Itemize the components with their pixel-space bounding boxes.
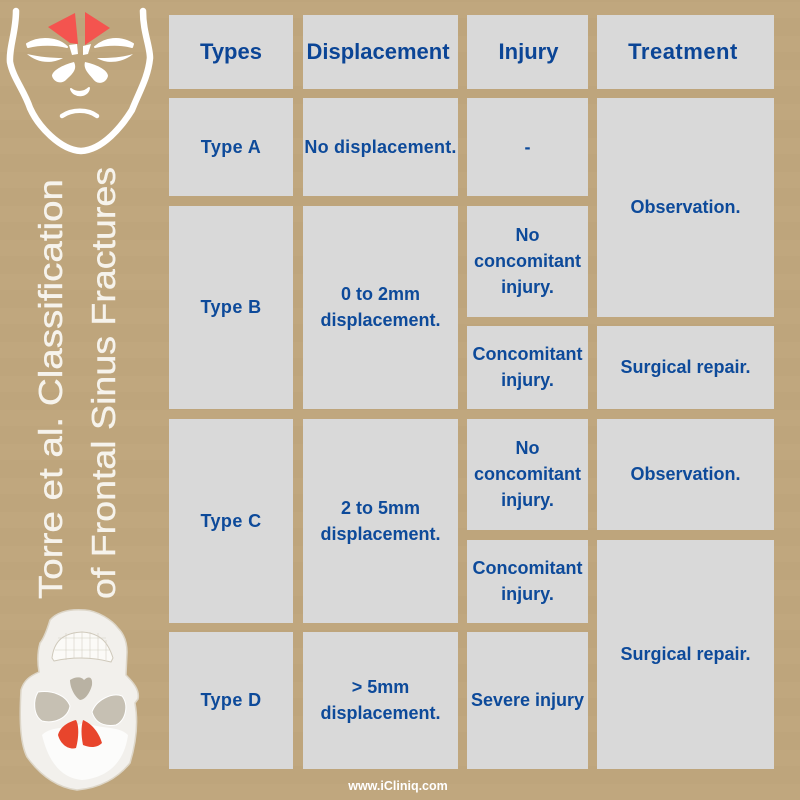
header: Displacement: Displacement: [306, 39, 450, 64]
row: Type D displacement: [303, 632, 458, 769]
row: Type B no concomitant injury: injury.: [501, 277, 554, 297]
row: Type C displacement: displacement.: [320, 524, 441, 544]
row: Type B concomitant injury: injury.: [501, 370, 554, 390]
header: Types: Types: [200, 39, 262, 64]
row: Type A label: [169, 98, 293, 196]
row: Type B no concomitant injury: [467, 206, 588, 317]
row: Type D label: [169, 632, 293, 769]
row: Type C no concomitant injury: No: [515, 438, 539, 458]
row: Type C concomitant injury: Concomitant: [472, 558, 582, 578]
header: Types: [169, 15, 293, 89]
row: Type C concomitant injury: injury.: [501, 584, 554, 604]
footer: website: www.iCliniq.com: [348, 779, 448, 793]
header: Displacement: [303, 15, 458, 89]
treatment: observation for C: [597, 419, 774, 530]
title: Torre et al. Classification: [32, 179, 69, 599]
table: classification: [169, 15, 774, 769]
header: Treatment: [597, 15, 774, 89]
row: Type B no concomitant injury: No: [515, 225, 539, 245]
row: Type B label: [169, 206, 293, 409]
treatment: surgical repair for C and D: [597, 540, 774, 769]
row: Type B displacement: 0 to 2mm: [341, 284, 420, 304]
header: Injury: Injury: [499, 39, 558, 64]
row: Type B displacement: displacement.: [320, 310, 441, 330]
header: Injury: [467, 15, 588, 89]
row: Type C displacement: 2 to 5mm: [341, 498, 420, 518]
row: Type D displacement: displacement.: [320, 703, 441, 723]
treatment: observation for A and B: [597, 98, 774, 317]
treatment: observation for C: Observation.: [630, 464, 741, 484]
row: Type C no concomitant injury: concomitant: [474, 464, 581, 484]
icon: skull with frontal sinuses: [20, 609, 140, 791]
treatment: surgical repair for B: Surgical repair.: [620, 357, 751, 377]
row: Type A injury: -: [524, 136, 530, 156]
treatment: surgical repair for C and D: Surgical repair.: [620, 644, 751, 664]
title: of Frontal Sinus Fractures: [85, 167, 122, 599]
treatment: observation for A and B: Observation.: [630, 197, 741, 217]
row: Type C label: Type C: [200, 510, 262, 530]
row: Type D severe injury: [467, 632, 588, 769]
row: Type B concomitant injury: [467, 326, 588, 409]
row: Type D displacement: > 5mm: [352, 677, 409, 697]
row: Type A displacement: No displacement.: [304, 136, 457, 156]
row: Type B displacement: [303, 206, 458, 409]
row: Type A displacement: [303, 98, 458, 196]
treatment: surgical repair for B: [597, 326, 774, 409]
row: Type B concomitant injury: Concomitant: [472, 344, 582, 364]
row: Type B label: Type B: [200, 297, 262, 317]
row: Type C label: [169, 419, 293, 623]
row: Type A injury: [467, 98, 588, 196]
row: Type A label: Type A: [201, 136, 261, 156]
row: Type D severe injury: Severe injury: [471, 690, 584, 710]
row: Type D label: Type D: [200, 690, 262, 710]
icon: face with frontal sinuses: [6, 8, 154, 154]
row: Type B no concomitant injury: concomitant: [474, 251, 581, 271]
header: Treatment: Treatment: [628, 39, 738, 64]
title: [32, 167, 122, 599]
row: Type C concomitant injury: [467, 540, 588, 623]
row: Type C no concomitant injury: injury.: [501, 490, 554, 510]
row: Type C displacement: [303, 419, 458, 623]
row: Type C no concomitant injury: [467, 419, 588, 530]
